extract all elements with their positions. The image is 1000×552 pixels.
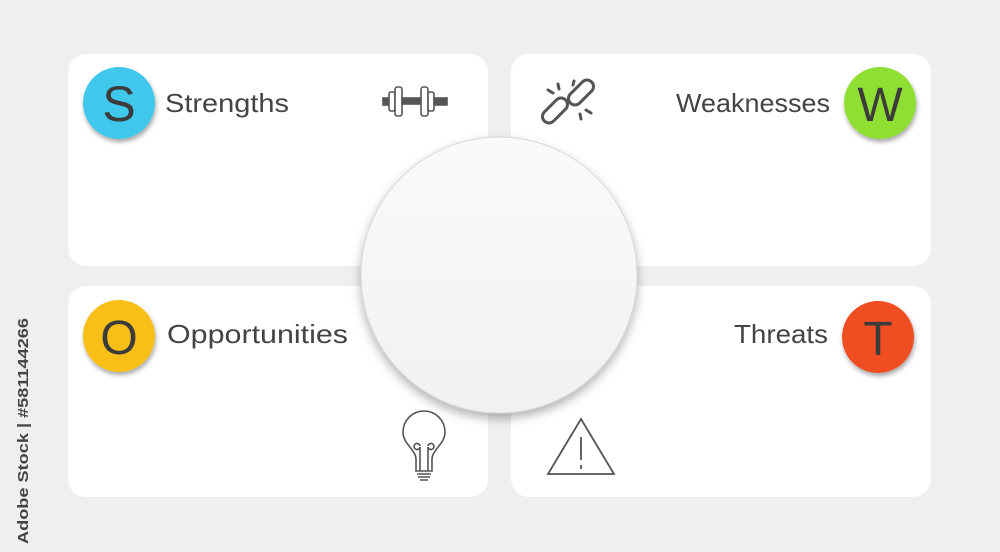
icon: broken link	[540, 77, 596, 126]
panel: threats	[511, 286, 931, 497]
heading: Opportunities: Opportunities	[167, 319, 348, 349]
center circle	[361, 137, 637, 413]
icon: lightbulb	[403, 411, 445, 480]
panel: weaknesses	[511, 54, 931, 266]
credit text: Adobe Stock | #581144266	[15, 318, 32, 544]
badge O	[83, 300, 155, 372]
badge W: W	[857, 79, 903, 132]
heading: Threats: Threats	[734, 319, 828, 349]
badge T	[842, 301, 914, 373]
badge O: O	[100, 312, 138, 365]
heading: Weaknesses: Weaknesses	[676, 88, 830, 118]
badge T: T	[863, 313, 893, 366]
badge W	[844, 67, 916, 139]
badge S: S	[102, 76, 136, 132]
panel: strengths	[68, 54, 488, 266]
icon: dumbbell	[383, 87, 447, 116]
panel: opportunities	[68, 286, 488, 497]
badge S	[83, 67, 155, 139]
icon: warning triangle	[548, 419, 614, 474]
heading: Strengths: Strengths	[165, 88, 289, 118]
